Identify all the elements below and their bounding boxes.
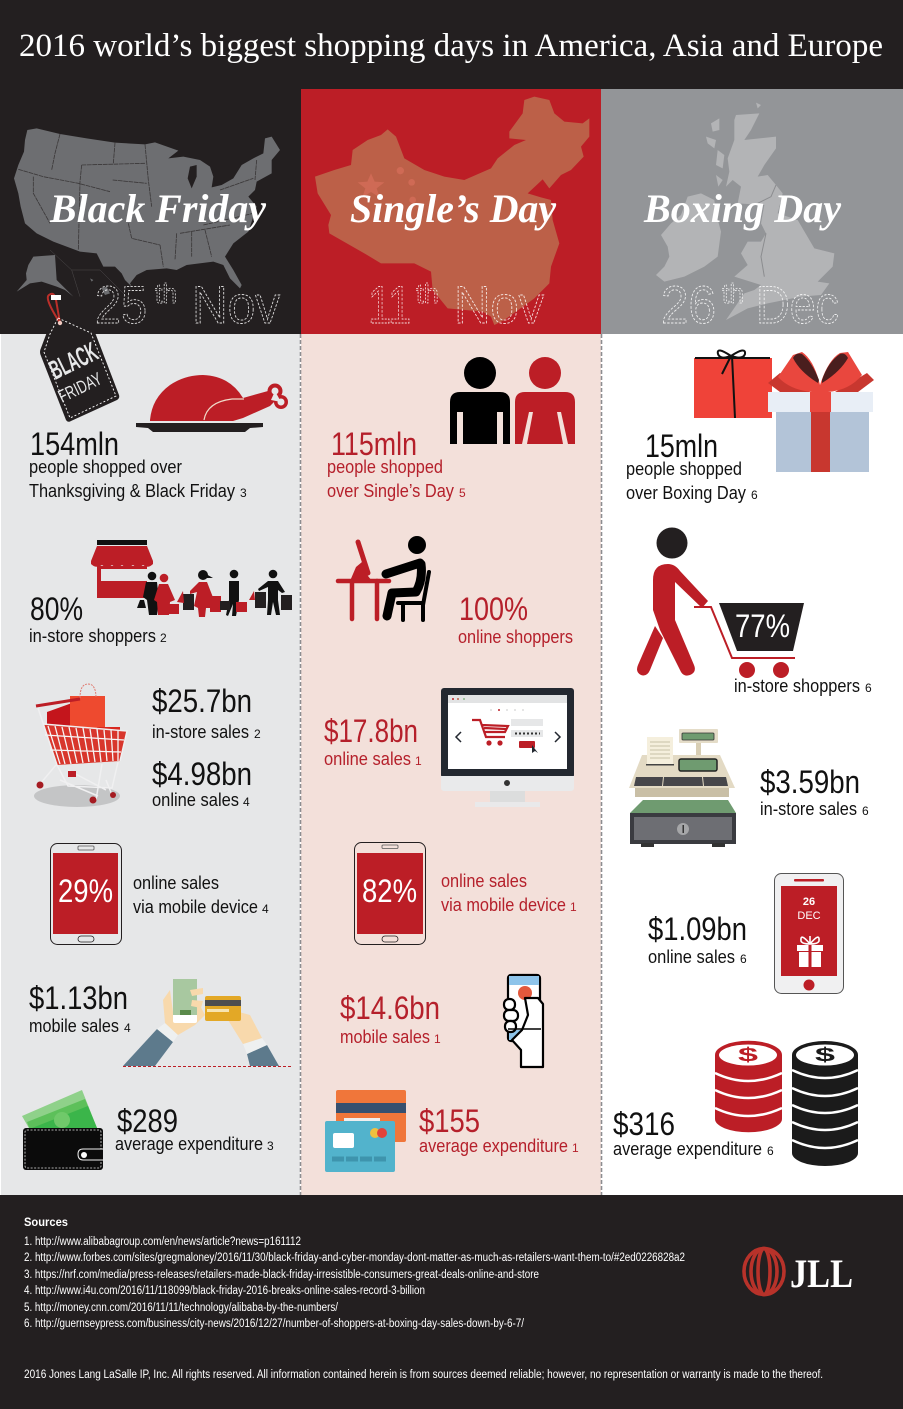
stat: in-store sales: [760, 764, 869, 819]
stat: online sales: online sales: [152, 790, 239, 810]
icon: person at computer: [338, 536, 429, 620]
icon: store and shoppers: [91, 540, 292, 617]
stat: average expenditure: 1: [572, 1141, 579, 1155]
panel: Boxing Day column: [613, 350, 874, 1166]
stat: 80%: [29, 591, 167, 646]
stat: mobile device: 1: [570, 900, 577, 914]
stat: mobile sales: [29, 980, 131, 1036]
date: Dec: [756, 276, 839, 335]
sources list: 6. http://guernseypress.com/business/city-news/2016/12/27/number-of-shoppers-at-boxing-day-sales-down-by-6-7/: [24, 1318, 525, 1330]
stat: average expenditure: 6: [767, 1144, 774, 1158]
stat: mobile device: online sales: [133, 873, 219, 893]
stat: 115mln: 115mln: [331, 426, 417, 462]
stat: in-store sales: $3.59bn: [760, 764, 860, 800]
stat: 15mln: 15mln: [645, 428, 718, 464]
date: 26: [661, 276, 716, 335]
map: USA: [14, 128, 280, 297]
icon: JLL logo: [744, 1248, 853, 1296]
stat: 15mln: 6: [751, 488, 758, 502]
stat: mobile device: via mobile device: [441, 895, 566, 915]
stat: online sales: online sales: [324, 749, 411, 769]
icon: credit cards: [325, 1090, 406, 1172]
stat: online sales: online sales: [648, 947, 735, 967]
stat: average expenditure: [613, 1106, 774, 1159]
date: th: [416, 278, 439, 309]
stat: 80%: 80%: [30, 591, 83, 627]
divider lines: [300, 334, 602, 1195]
stat: average expenditure: [419, 1103, 579, 1156]
stat: 15mln: [626, 428, 758, 503]
stat: mobile sales: mobile sales: [29, 1016, 119, 1036]
stat: 154mln: 154mln: [30, 426, 119, 462]
percent: 82%: [362, 873, 417, 909]
panel: Boxing Day banner: [601, 89, 903, 335]
stat: 154mln: 3: [240, 486, 247, 500]
date: Nov: [454, 276, 544, 335]
panel: Black Friday column: [1, 294, 300, 1195]
stat: 100%: 100%: [459, 591, 528, 627]
icon: desktop monitor: [441, 688, 574, 807]
icon: gift boxes: [694, 350, 874, 472]
icon: phone 82%: [354, 842, 426, 944]
stat: online sales: $4.98bn: [152, 756, 252, 792]
stat: 115mln: over Single’s Day: [327, 481, 454, 501]
stat: average expenditure: average expenditure: [419, 1136, 568, 1156]
sources list: 4. http://www.i4u.com/2016/11/118099/black-friday-2016-breaks-online-sales-record-3-billion: [24, 1285, 425, 1297]
stat: average expenditure: $155: [419, 1103, 480, 1139]
icon: Black Friday tag: [40, 294, 119, 422]
date: [661, 276, 839, 335]
icon: person with cart: [637, 528, 804, 678]
sources heading: Sources: [24, 1215, 68, 1229]
icon: coin stacks: [715, 1041, 858, 1166]
heading: Boxing Day: [643, 186, 841, 231]
stat: mobile device: via mobile device: [133, 897, 258, 917]
heading: Single’s Day: [350, 186, 556, 231]
stat: 154mln: Thanksgiving & Black Friday: [29, 481, 235, 501]
stat: in-store sales: 2: [254, 727, 261, 741]
panel: Single's Day column: [301, 334, 601, 1195]
icon: shopping cart with bags: [34, 684, 127, 807]
stat: mobile sales: [340, 990, 441, 1047]
stat: 115mln: people shopped: [327, 457, 443, 477]
date: Nov: [192, 276, 280, 335]
sources list: 3. https://nrf.com/media/press-releases/retailers-made-black-friday-irresistible-consumers-great-deals-online-and-store: [24, 1269, 539, 1281]
panel: Single's Day banner: [301, 89, 601, 335]
stat: mobile sales: 4: [124, 1021, 131, 1035]
sources list: [24, 1236, 685, 1330]
stat: 154mln: [29, 426, 247, 501]
stat: mobile sales: mobile sales: [340, 1027, 430, 1047]
logo text: JLL: [790, 1251, 853, 1296]
stat: online sales: $17.8bn: [324, 713, 418, 749]
date text: DEC: [797, 910, 821, 922]
date: [368, 276, 544, 335]
icon: roast turkey: [136, 375, 288, 432]
stat: mobile sales: $1.13bn: [29, 980, 128, 1016]
stat: 100%: [458, 591, 573, 647]
sources list: 5. http://money.cnn.com/2016/11/11/technology/alibaba-by-the-numbers/: [24, 1302, 339, 1314]
tag text: FRIDAY: [55, 368, 105, 407]
stat: in-store sales: 6: [862, 804, 869, 818]
stat: in-store sales: in-store sales: [760, 799, 857, 819]
panel: footer: [0, 1195, 903, 1409]
stat: online sales: 1: [415, 754, 422, 768]
date: th: [155, 278, 177, 309]
stat: online sales: [152, 756, 252, 810]
panel: Black Friday banner: [0, 89, 301, 335]
icon: wallet with cash: [22, 1090, 103, 1170]
dollar sign: $: [815, 1045, 836, 1066]
sources list: 1. http://www.alibabagroup.com/en/news/article?news=p161112: [24, 1236, 301, 1248]
stat: mobile sales: $14.6bn: [340, 990, 440, 1026]
icon: phone 29%: [50, 844, 122, 944]
stat: in-store sales: in-store sales: [152, 722, 249, 742]
map: China: [315, 97, 589, 325]
sources list: 2. http://www.forbes.com/sites/gregmaloney/2016/11/30/black-friday-and-cyber-monday-dont-matter-as-much-as-retailers-want-them-to/#2ed0226828a2: [24, 1252, 685, 1264]
stat: 80%: in-store shoppers: [29, 626, 156, 646]
date: th: [722, 278, 744, 309]
icon: phone with gift: [774, 874, 844, 994]
stat: online sales: [648, 911, 747, 967]
dollar sign: $: [738, 1045, 759, 1066]
stat: mobile sales: 1: [434, 1032, 441, 1046]
percent: 29%: [58, 873, 113, 909]
stat: mobile device: [441, 871, 577, 915]
stat: mobile device: [133, 873, 269, 917]
stat: average expenditure: average expenditure: [115, 1134, 263, 1154]
icon: hand holding phone: [504, 975, 543, 1067]
date: [95, 276, 280, 335]
title: 2016 world’s biggest shopping days in America, Asia and Europe: [19, 28, 883, 64]
stat: in-store shoppers: in-store shoppers: [734, 676, 860, 696]
stat: online sales: 4: [243, 795, 250, 809]
stat: online sales: [324, 713, 422, 769]
stat: in-store sales: [152, 683, 261, 742]
stat: average expenditure: average expenditure: [613, 1139, 762, 1159]
header band: [0, 0, 903, 89]
stat: online sales: 6: [740, 952, 747, 966]
stat: 80%: 2: [160, 631, 167, 645]
stat: average expenditure: $289: [117, 1103, 178, 1139]
stat: 115mln: [327, 426, 466, 501]
stat: mobile device: online sales: [441, 871, 527, 891]
heading: Black Friday: [49, 186, 266, 231]
stat: average expenditure: [115, 1103, 274, 1154]
stat: 15mln: over Boxing Day: [626, 483, 746, 503]
stat: average expenditure: 3: [267, 1139, 274, 1153]
date: 11: [368, 276, 411, 335]
tag text: BLACK: [44, 336, 103, 385]
icon: two people: [450, 357, 575, 444]
date: 25: [95, 276, 147, 335]
percent: 77%: [735, 608, 790, 644]
icon: hands with phone and card: [123, 979, 293, 1066]
icon: cash register: [629, 729, 736, 847]
stat: 115mln: 5: [459, 486, 466, 500]
stat: 15mln: people shopped: [626, 459, 742, 479]
stat: 154mln: people shopped over: [29, 457, 182, 477]
stat: online sales: $1.09bn: [648, 911, 747, 947]
stat: mobile device: 4: [262, 902, 269, 916]
date text: 26: [803, 896, 815, 908]
stat: in-store sales: $25.7bn: [152, 683, 252, 719]
stat: in-store shoppers: 6: [865, 681, 872, 695]
stat: average expenditure: $316: [613, 1106, 675, 1142]
stat: 100%: online shoppers: [458, 627, 573, 647]
map: UK and Ireland: [656, 103, 834, 320]
